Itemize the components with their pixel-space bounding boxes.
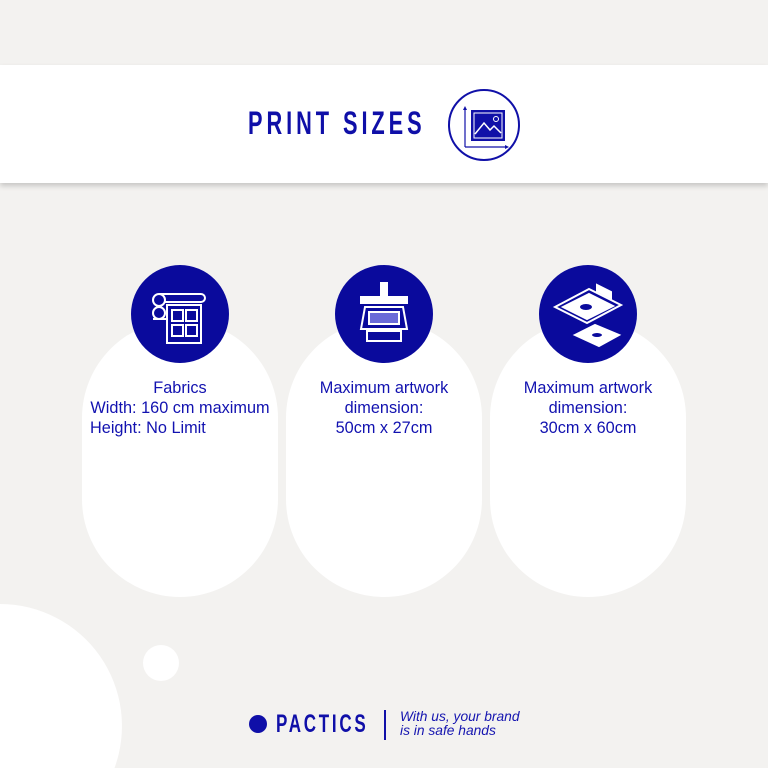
divider — [384, 710, 386, 740]
text: artwork 30x60: Maximum artwork — [524, 379, 652, 397]
text: artwork 50x27 — [320, 379, 448, 437]
text: artwork 30x60 — [524, 379, 652, 437]
text: artwork 30x60: 30cm x 60cm — [540, 419, 636, 437]
brand name: PACTICS — [276, 710, 368, 738]
text: fabrics — [90, 379, 270, 437]
text: fabrics: Fabrics — [153, 379, 207, 397]
tagline — [400, 709, 520, 738]
text: fabrics: Height: No Limit — [90, 419, 206, 437]
text: artwork 50x27: Maximum artwork — [320, 379, 448, 397]
icon: image dimensions — [448, 89, 520, 161]
text: fabrics: Width: 160 cm maximum — [90, 399, 270, 417]
text: artwork 50x27: dimension: — [345, 399, 423, 417]
tagline: With us, your brand — [400, 709, 520, 724]
text: artwork 30x60: dimension: — [549, 399, 627, 417]
header band — [0, 65, 768, 183]
title: PRINT SIZES — [248, 105, 426, 141]
tagline: is in safe hands — [400, 723, 496, 738]
panel: artwork 50x27 — [286, 320, 482, 597]
icon: screen printing — [539, 265, 637, 363]
icon: fabric printer — [131, 265, 229, 363]
icon: heat press — [335, 265, 433, 363]
decorative big circle — [0, 604, 122, 768]
logo dot — [249, 715, 267, 733]
panel: artwork 30x60 — [490, 320, 686, 597]
footer logo — [249, 709, 520, 740]
text: artwork 50x27: 50cm x 27cm — [336, 419, 432, 437]
panel: fabrics — [82, 320, 278, 597]
decorative small circle — [143, 645, 179, 681]
